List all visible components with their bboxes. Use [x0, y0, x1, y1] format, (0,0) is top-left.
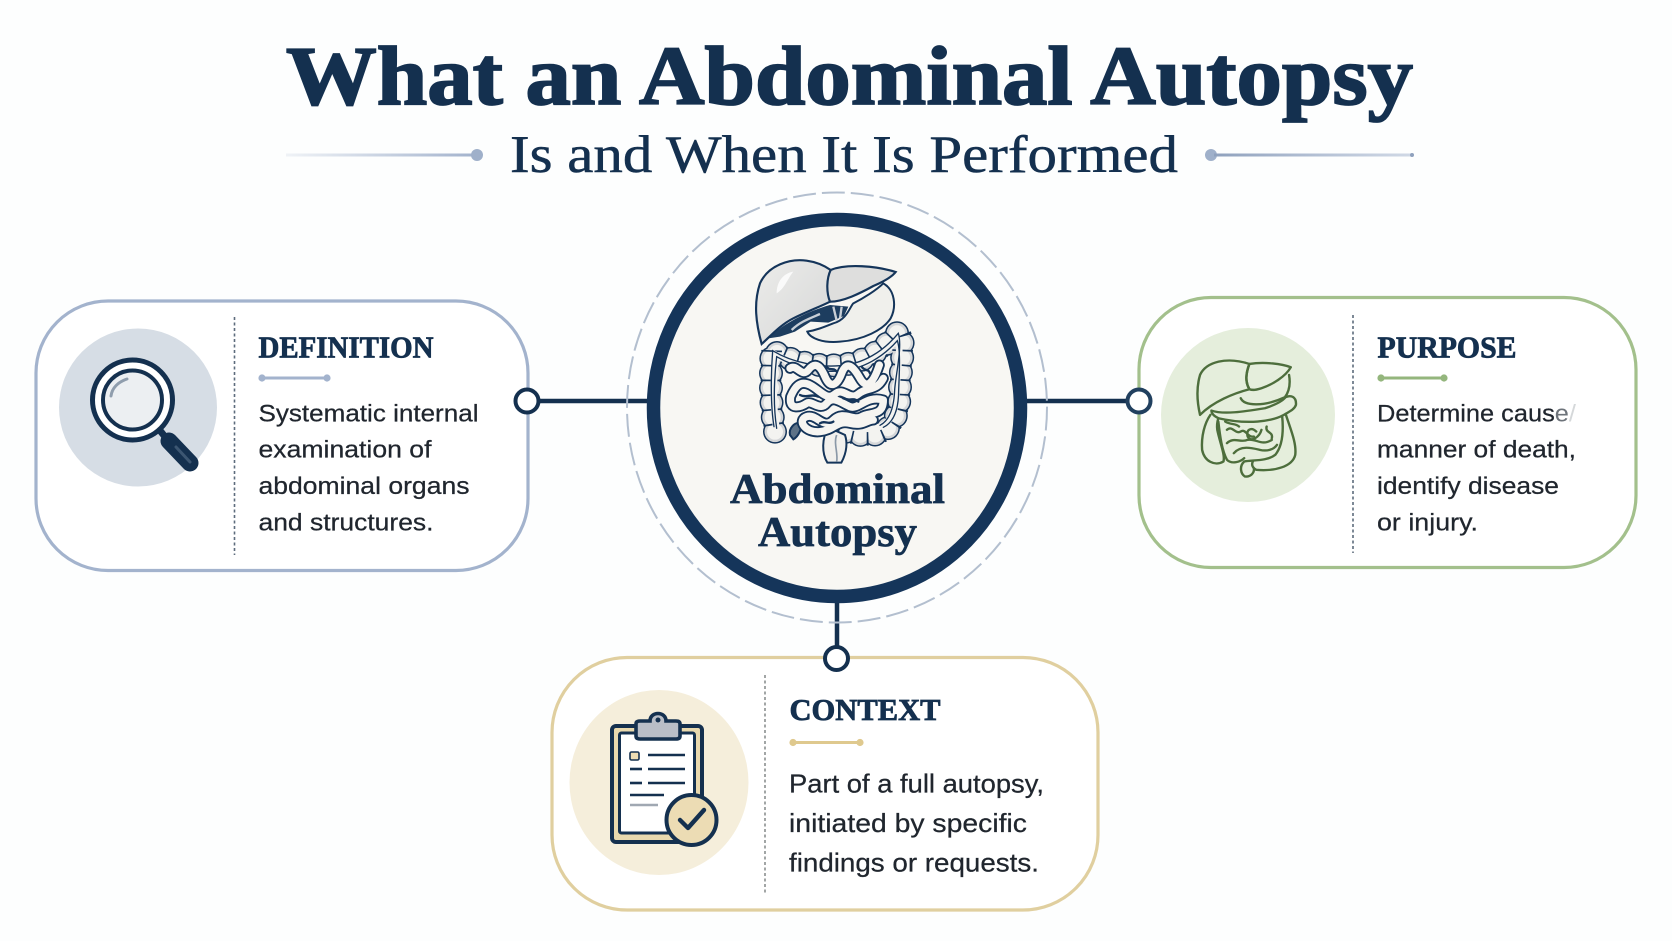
- transverse colon: [1211, 396, 1296, 422]
- right rule: [1205, 149, 1414, 161]
- connector: center to context: [835, 598, 839, 658]
- icon: clipboard with check: [570, 690, 748, 875]
- liver left lobe: [827, 266, 896, 302]
- purpose text: manner of death,: [1377, 436, 1576, 464]
- panel: purpose: [1139, 298, 1636, 568]
- colon band lines: [771, 333, 900, 430]
- left rule: [286, 149, 483, 161]
- dashed halo: [627, 192, 1047, 622]
- small intestine: [1218, 422, 1277, 462]
- liver right lobe: [756, 260, 831, 344]
- heading: purpose: PURPOSE: [1378, 330, 1516, 364]
- central circle: [627, 192, 1047, 622]
- definition text: examination of: [258, 436, 432, 464]
- definition text: and structures.: [258, 510, 434, 536]
- card outline: [36, 301, 528, 570]
- small intestine: [790, 365, 883, 432]
- liver lobes: [1197, 361, 1249, 415]
- descending colon and sigmoid: [1252, 414, 1295, 470]
- purpose text: Determine caus e/: [1377, 400, 1576, 428]
- illustration: abdominal organs: [756, 260, 903, 463]
- heading underline: [1377, 374, 1448, 382]
- purpose text: identify disease: [1377, 473, 1559, 500]
- definition text: Systematic internal: [258, 400, 478, 428]
- context text: Part of a full autopsy,: [789, 768, 1044, 798]
- context text: initiated by specific: [789, 808, 1027, 838]
- definition text: [258, 400, 478, 536]
- context text: findings or requests.: [789, 848, 1039, 878]
- stomach: [807, 283, 894, 342]
- icon: magnifying glass: [59, 328, 217, 486]
- colon: [771, 332, 903, 435]
- divider: [234, 317, 236, 555]
- divider: [1352, 315, 1354, 553]
- subtitle text: Is and When It Is Performed: [510, 126, 1178, 184]
- rectum: [823, 427, 846, 463]
- purpose text: or injury.: [1377, 510, 1478, 536]
- title: What an Abdominal Autopsy: [286, 30, 1413, 123]
- navy ring: [654, 220, 1020, 596]
- purpose text: [1377, 400, 1576, 536]
- card outline: [1139, 298, 1636, 568]
- center label: [730, 467, 945, 556]
- connector node: purpose: [1128, 390, 1150, 412]
- connector node: definition: [516, 390, 538, 412]
- subtitle with side rules: [286, 126, 1414, 184]
- definition text: abdominal organs: [258, 473, 470, 500]
- appendix: [790, 423, 801, 439]
- heading underline: [258, 374, 331, 382]
- connector: center to definition: [527, 399, 650, 403]
- card outline: [552, 658, 1098, 910]
- panel: definition: [36, 301, 528, 570]
- icon: green organ outline: [1161, 328, 1335, 502]
- center label: Autopsy: [758, 510, 917, 556]
- connector: center to purpose: [1024, 399, 1139, 403]
- center label: Abdominal: [730, 467, 945, 513]
- connector node: context: [825, 647, 848, 670]
- panel: context: [552, 658, 1098, 910]
- heading underline: [789, 739, 864, 746]
- ascending colon: [1202, 415, 1224, 463]
- context text: [789, 768, 1044, 878]
- structures under liver: [768, 305, 848, 338]
- liver highlight: [777, 272, 793, 293]
- heading: context: CONTEXT: [790, 692, 941, 727]
- haustra ticks: [771, 332, 903, 435]
- heading: definition: DEFINITION: [258, 330, 434, 364]
- divider: [764, 675, 766, 894]
